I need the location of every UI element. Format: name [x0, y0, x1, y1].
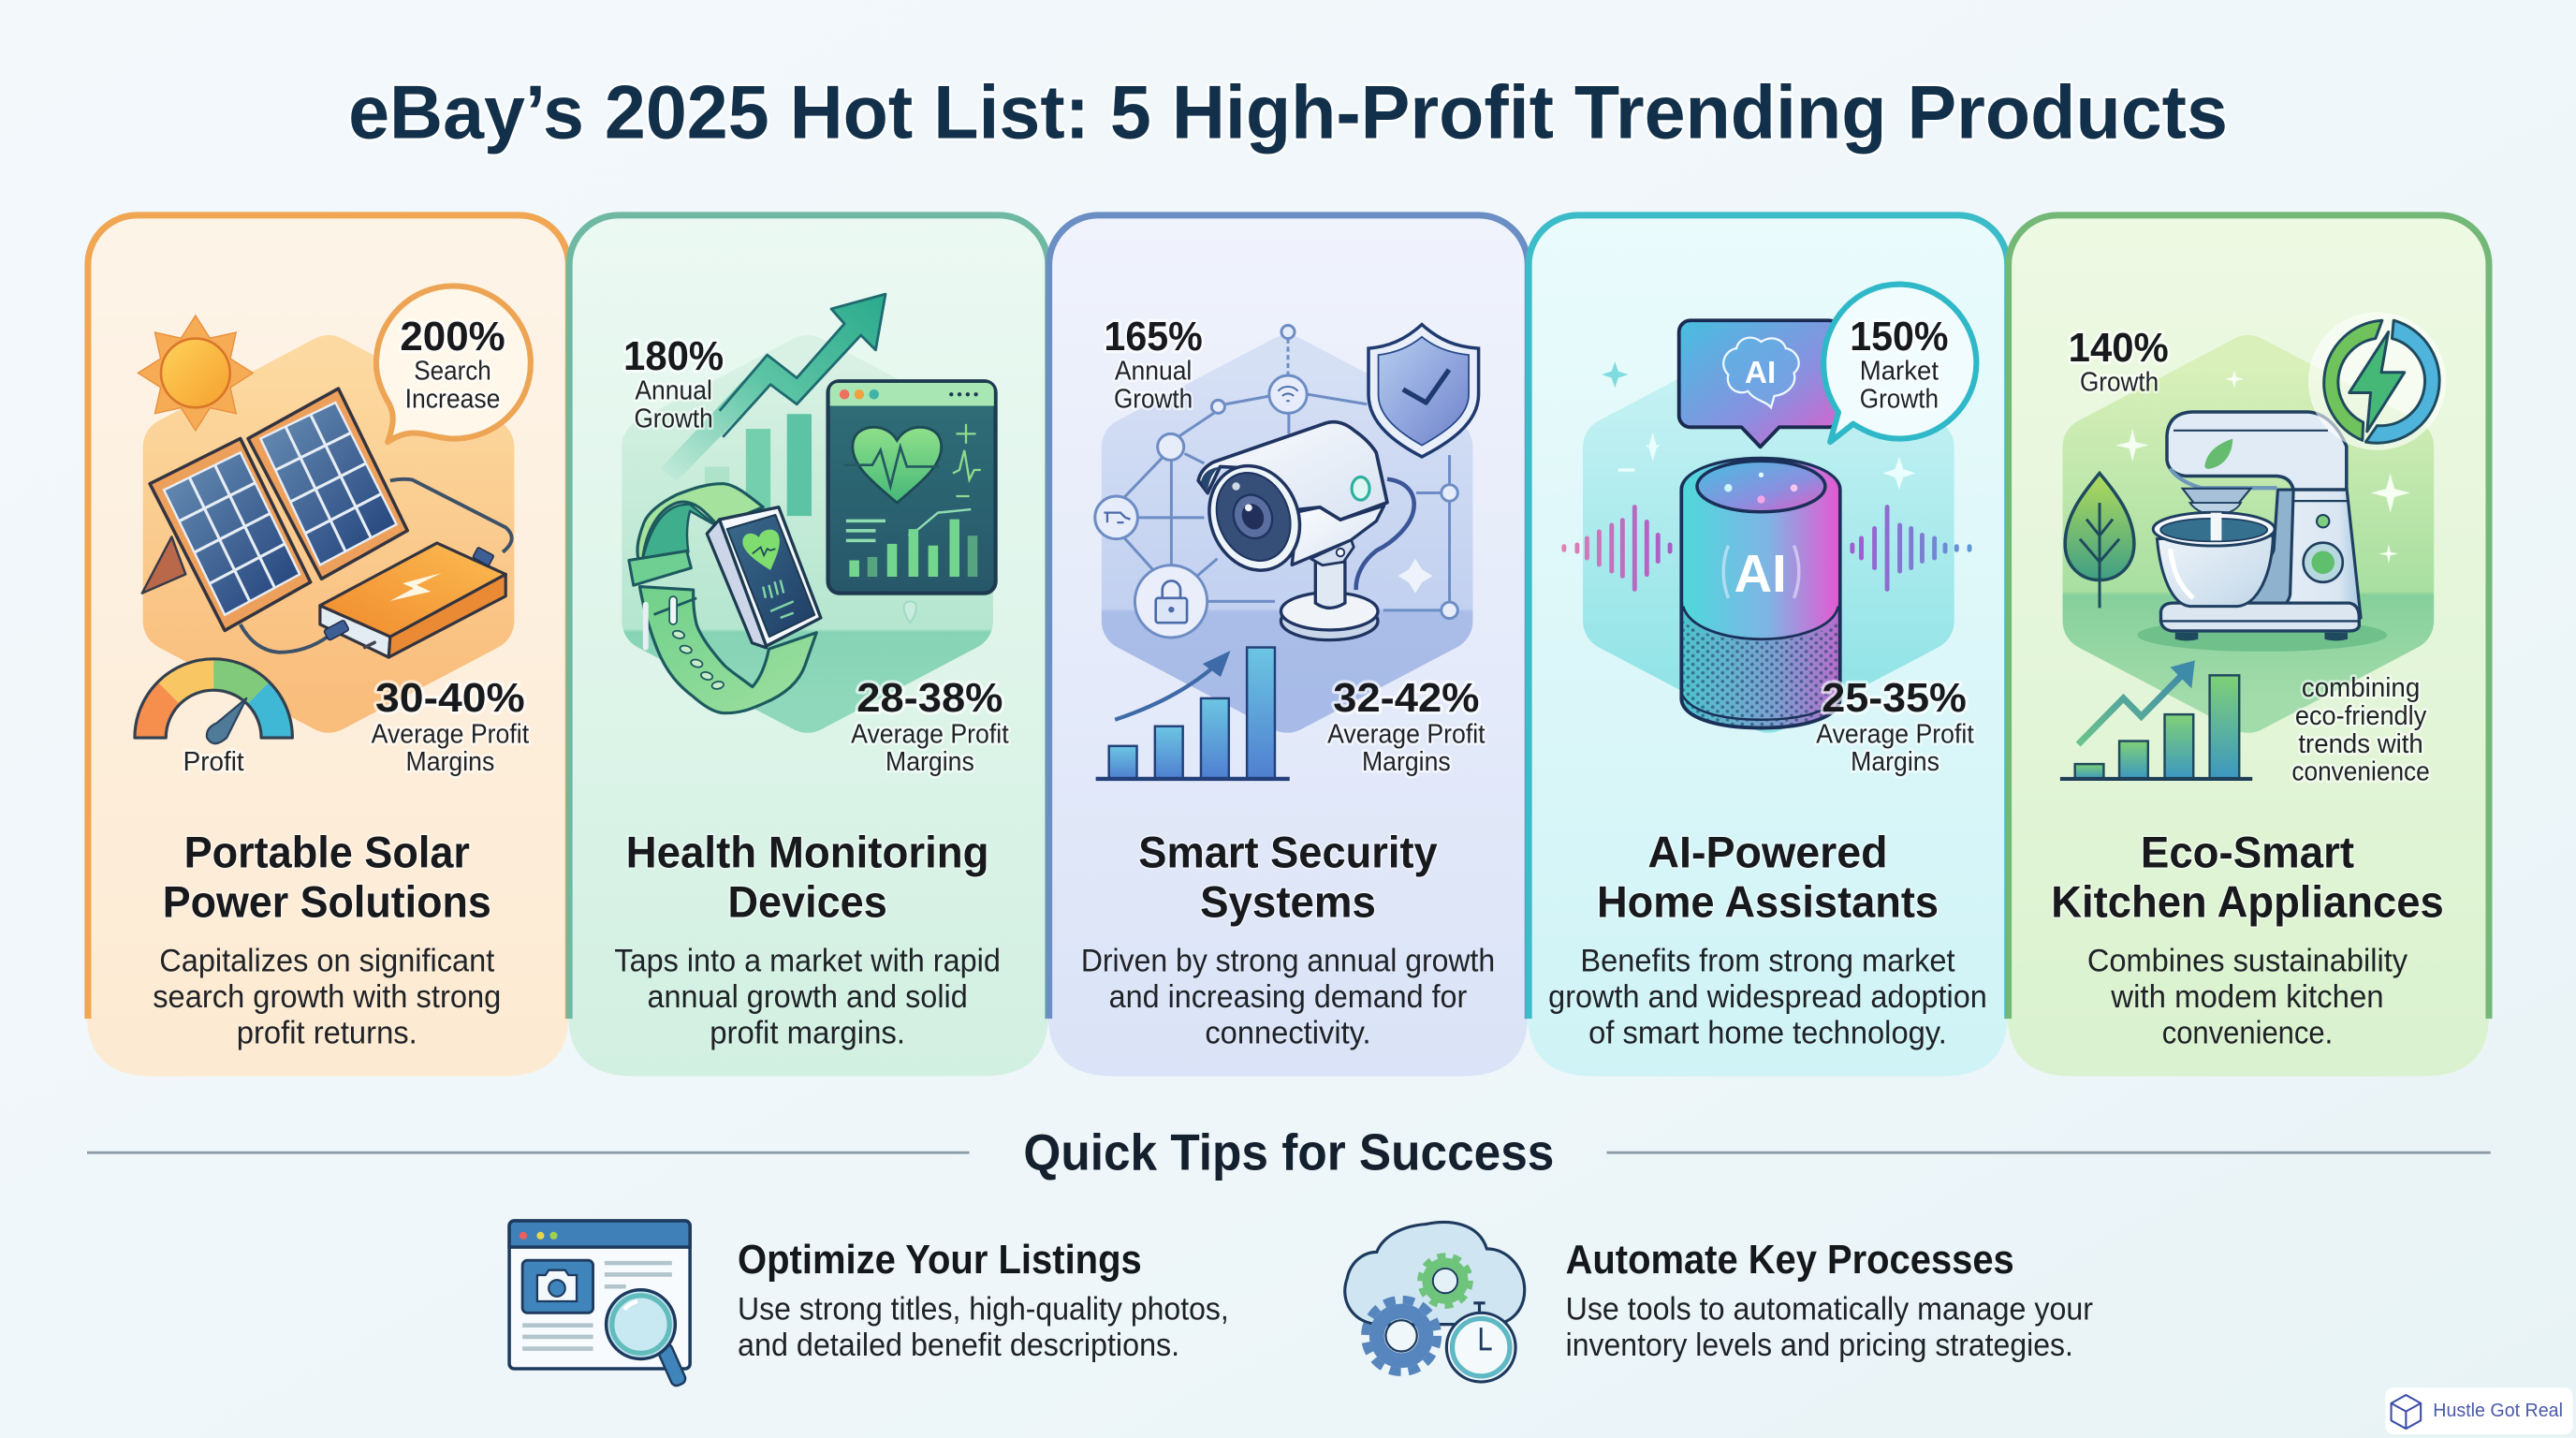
text block: annual growth and solid	[648, 979, 968, 1015]
stat: 25-35% margins: Average Profit	[1816, 719, 1974, 749]
icon: browser listing and magnifier	[509, 1221, 690, 1387]
callout: 150% market growth	[1823, 285, 1976, 442]
text block	[2087, 943, 2408, 1050]
heading: Eco-Smart	[2141, 829, 2354, 878]
text block: Taps into a market with rapid	[614, 943, 1001, 978]
stat: 30-40% margins: Margins	[406, 747, 494, 777]
stat: 140% growth: Growth	[2080, 368, 2159, 398]
icon: cloud gears and clock	[1345, 1222, 1525, 1382]
callout: 200% search increase: Increase	[405, 384, 500, 414]
heading: Health Monitoring	[626, 829, 989, 878]
panel: Eco-Smart Kitchen Appliances	[2008, 215, 2489, 1077]
icon: growth bars and arrow	[661, 294, 886, 527]
icon: green energy ring	[2308, 312, 2446, 450]
stat: 180% annual growth: Growth	[634, 404, 713, 433]
text block: profit returns.	[237, 1015, 417, 1050]
stat: 32-42% margins: Average Profit	[1327, 719, 1486, 749]
text block: eco-friendly note: trends with	[2298, 729, 2423, 759]
stat: 180% annual growth: 180%	[623, 333, 724, 379]
callout: 200% search increase: 200%	[400, 314, 505, 360]
icon: cube logo	[2392, 1395, 2421, 1429]
stat: 30-40% margins: 30-40%	[375, 675, 525, 721]
stat: 165% annual growth: Annual	[1115, 356, 1192, 386]
icon: sparkles	[1602, 361, 1915, 490]
callout: 200% search increase	[376, 286, 531, 442]
text block: eco-friendly note: convenience	[2291, 757, 2430, 787]
icon: profit gauge	[135, 659, 292, 777]
icon: smart speaker	[1681, 459, 1840, 728]
heading: Power Solutions	[163, 877, 491, 927]
heading	[163, 829, 491, 927]
heading: Automate Key Processes	[1566, 1237, 2014, 1283]
heading: Kitchen Appliances	[2051, 877, 2444, 927]
stat: 165% annual growth: 165%	[1104, 314, 1203, 360]
text block: search growth with strong	[153, 979, 501, 1015]
icon: network nodes	[1095, 326, 1457, 638]
heading: Quick Tips for Success: Quick Tips for Success	[1023, 1124, 1554, 1181]
text block	[614, 943, 1001, 1050]
panel: Health Monitoring Devices	[568, 215, 1048, 1077]
text block: profit margins.	[710, 1015, 905, 1050]
panel: Portable Solar Power Solutions	[87, 215, 568, 1077]
text block: eco-friendly note: eco-friendly	[2295, 701, 2427, 731]
stat: 28-38% margins: 28-38%	[856, 675, 1003, 721]
stat: 180% annual growth	[623, 333, 724, 433]
text block: Use strong titles, high-quality photos,	[738, 1291, 1229, 1327]
stat: 25-35% margins: 25-35%	[1822, 675, 1967, 721]
heading: Home Assistants	[1597, 877, 1939, 927]
text block: Benefits from strong market	[1580, 943, 1955, 978]
icon: AI chat bubble	[1679, 320, 1840, 447]
heading: Devices	[728, 877, 887, 927]
icon: sparkles	[2116, 370, 2410, 564]
heading: Optimize Your Listings	[738, 1237, 1142, 1283]
stat: 165% annual growth: Growth	[1114, 384, 1193, 414]
icon: profit gauge: Profit	[183, 747, 244, 777]
heading	[1138, 829, 1438, 927]
text block: eco-friendly note: combining	[2302, 673, 2420, 703]
stat: 28-38% margins: Margins	[886, 747, 974, 777]
icon: solar panels and power bank	[142, 389, 512, 657]
text block	[1081, 943, 1495, 1050]
text block	[1548, 943, 1987, 1050]
bar chart: rising bars with arrow	[2060, 661, 2252, 779]
stat: 28-38% margins: Average Profit	[851, 719, 1009, 749]
text block: connectivity.	[1205, 1015, 1371, 1050]
stat: 25-35% margins: Margins	[1851, 747, 1939, 777]
stat: 140% growth: 140%	[2069, 325, 2169, 371]
text block: and increasing demand for	[1109, 979, 1467, 1015]
icon: leaf	[2065, 473, 2134, 608]
stat: 32-42% margins: Margins	[1362, 747, 1451, 777]
heading	[1597, 829, 1939, 927]
text block: Driven by strong annual growth	[1081, 943, 1495, 978]
heading: Portable Solar	[184, 829, 470, 878]
text block: with modem kitchen	[2110, 979, 2384, 1015]
stat: 165% annual growth	[1104, 314, 1203, 414]
icon: smart speaker: AI	[1734, 544, 1787, 603]
stat: 28-38% margins	[851, 675, 1009, 777]
heading: Smart Security	[1138, 829, 1438, 878]
text block: convenience.	[2162, 1015, 2333, 1050]
heading: Systems	[1200, 877, 1376, 927]
stat: 25-35% margins	[1816, 675, 1974, 777]
text block: inventory levels and pricing strategies.	[1566, 1328, 2073, 1363]
callout: 200% search increase: Search	[414, 356, 491, 386]
text block: eco-friendly note	[2291, 673, 2430, 787]
panel: AI-Powered Home Assistants	[1528, 215, 2008, 1077]
callout: 150% market growth: 150%	[1850, 314, 1949, 360]
icon: shield with check	[1368, 325, 1479, 457]
icon: stand mixer	[2137, 412, 2387, 652]
watermark badge: Hustle Got Real	[2433, 1401, 2563, 1421]
text block: Combines sustainability	[2087, 943, 2408, 978]
bar chart: rising bars	[1096, 648, 1290, 779]
text block: of smart home technology.	[1588, 1015, 1947, 1050]
heading	[2051, 829, 2444, 927]
watermark badge	[2385, 1387, 2572, 1434]
text block: Capitalizes on significant	[159, 943, 495, 978]
text block: and detailed benefit descriptions.	[738, 1328, 1179, 1363]
icon: fitness smartwatch	[629, 484, 821, 713]
icon: health dashboard	[828, 381, 996, 623]
panel: Smart Security Systems	[1048, 215, 1528, 1077]
callout: 150% market growth: Market	[1860, 356, 1939, 386]
icon: sound waves	[1564, 507, 1969, 589]
stat: 30-40% margins: Average Profit	[372, 719, 529, 749]
stat: 32-42% margins: 32-42%	[1333, 675, 1479, 721]
stat: 180% annual growth: Annual	[635, 375, 712, 405]
title: eBay’s 2025 Hot List: 5 High-Profit Trending Products	[348, 70, 2228, 154]
text block: Use tools to automatically manage your	[1566, 1291, 2093, 1327]
text block: growth and widespread adoption	[1548, 979, 1987, 1015]
heading	[626, 829, 989, 927]
stat: 32-42% margins	[1327, 675, 1486, 777]
heading: AI-Powered	[1647, 829, 1888, 878]
callout: 150% market growth: Growth	[1860, 384, 1939, 414]
stat: 30-40% margins	[372, 675, 529, 777]
tip: Automate Key Processes	[1345, 1222, 2093, 1382]
tip: Optimize Your Listings	[509, 1221, 1229, 1387]
icon: security camera	[1194, 422, 1414, 640]
icon: AI chat bubble: AI	[1745, 356, 1776, 390]
text block	[153, 943, 501, 1050]
text block	[1566, 1291, 2093, 1363]
icon: sun	[138, 315, 253, 431]
stat: 140% growth	[2069, 325, 2169, 398]
text block	[738, 1291, 1229, 1363]
